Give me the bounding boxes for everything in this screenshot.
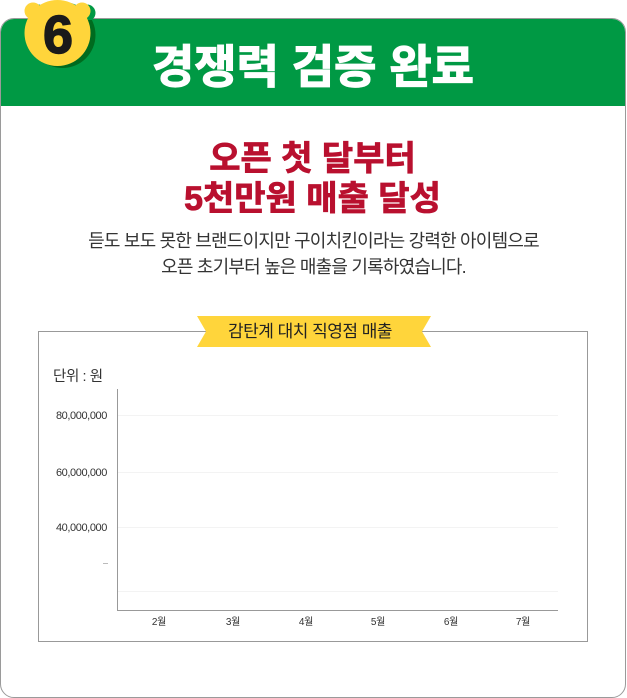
bar chart: empty axes: 80,000,000 [56, 410, 107, 422]
bar chart: empty axes: 3월 [226, 617, 240, 628]
header band [0, 18, 627, 106]
heading: red headline: 5천만원 매출 달성 [184, 180, 441, 218]
ribbon: chart title [197, 316, 431, 347]
bar chart: empty axes: 2월 [152, 617, 166, 628]
text block: description: 오픈 초기부터 높은 매출을 기록하였습니다. [161, 257, 466, 277]
icon: bear badge with number 6: 6 [43, 5, 73, 65]
bar chart: empty axes: 7월 [516, 617, 530, 628]
bar chart: empty axes: 60,000,000 [56, 467, 107, 479]
bar chart: empty axes: 6월 [444, 617, 458, 628]
unit label: 단위 : 원 [53, 369, 103, 385]
text block: description: 듣도 보도 못한 브랜드이지만 구이치킨이라는 강력한 아이템으로 [88, 231, 539, 251]
panel: chart frame [38, 331, 588, 642]
bar chart: empty axes: 5월 [371, 617, 385, 628]
text block: description [88, 231, 539, 277]
icon: bear badge with number 6 [24, 0, 96, 68]
heading: red headline: 오픈 첫 달부터 [209, 140, 416, 178]
heading: red headline [184, 140, 441, 218]
title: 경쟁력 검증 완료 [152, 31, 474, 97]
ribbon: chart title: 감탄계 대치 직영점 매출 [228, 322, 392, 341]
bar chart: empty axes: 40,000,000 [56, 522, 107, 534]
bar chart: empty axes: 4월 [299, 617, 313, 628]
